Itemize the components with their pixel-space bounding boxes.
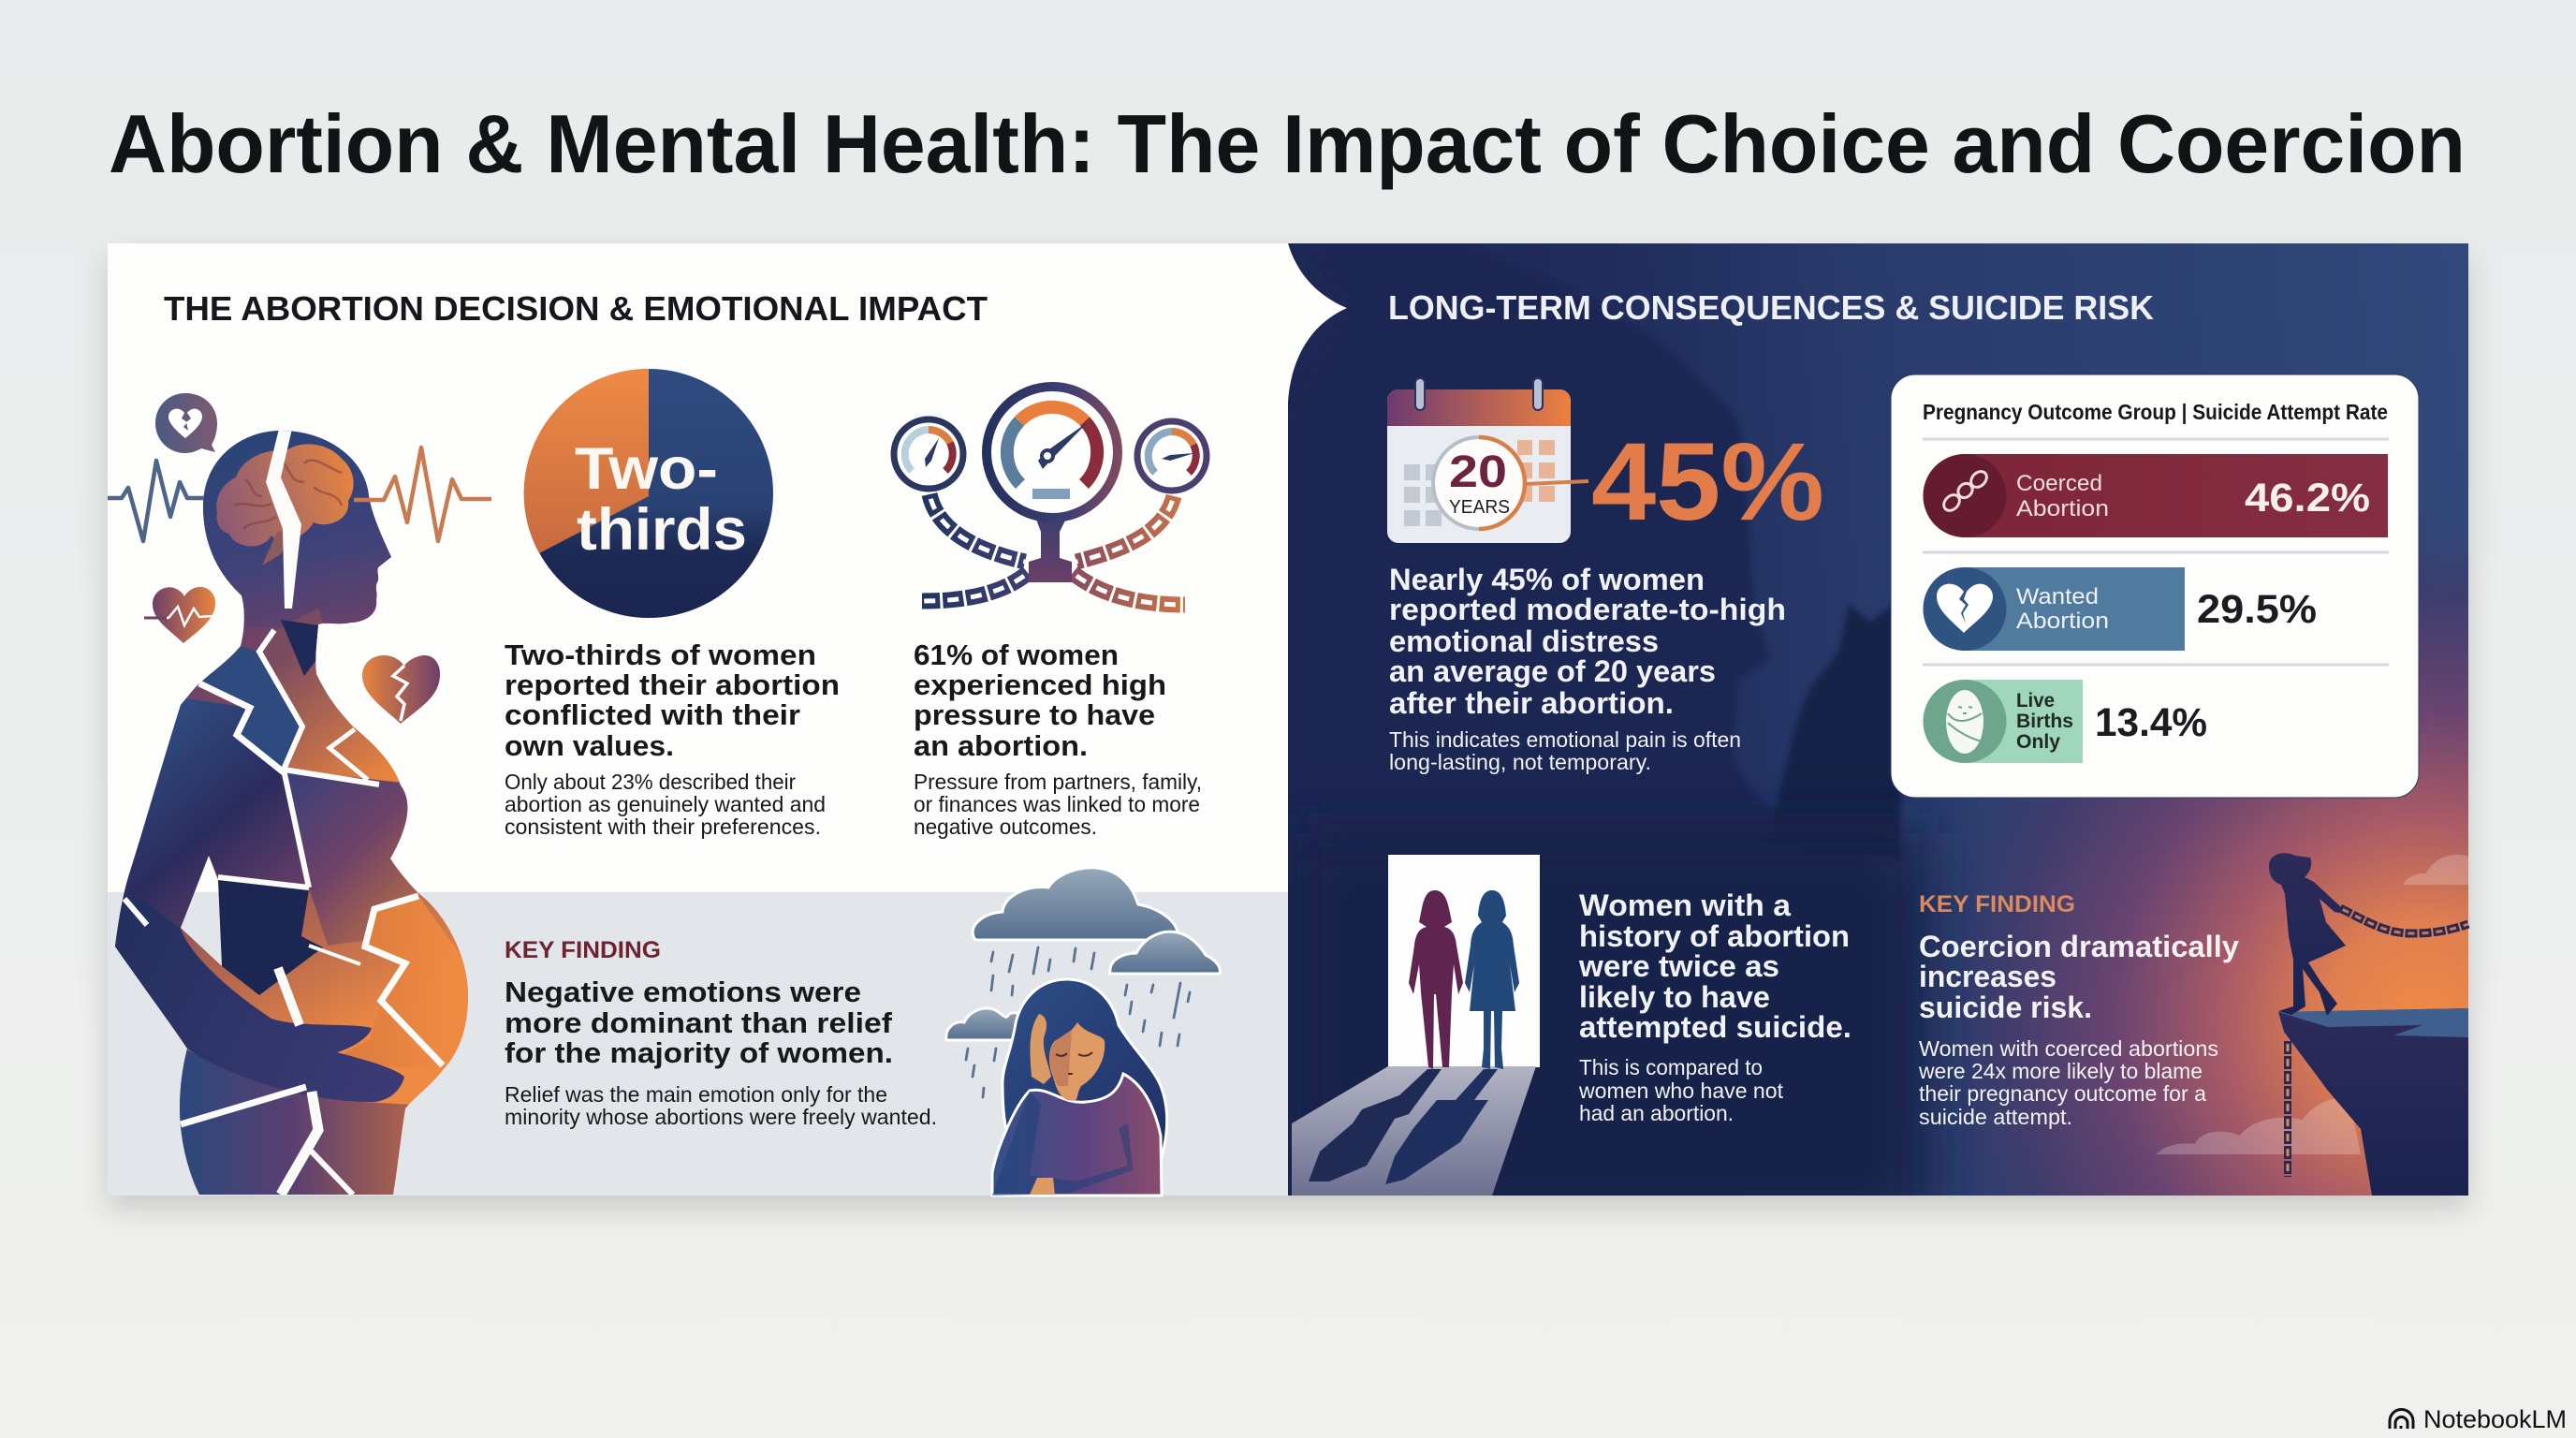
text block: twice as likely: This is compared to (1579, 1055, 1763, 1079)
chart: two-thirds pie (524, 369, 773, 618)
bar: live births only: Live (2016, 690, 2055, 712)
text block: key finding right: suicide attempt. (1919, 1105, 2072, 1129)
text block: two-thirds conflicted: Only about 23% described their (505, 770, 796, 794)
text block: two-thirds conflicted: conflicted with their (505, 698, 800, 731)
icon: speech bubble with broken heart (155, 393, 217, 453)
icon: horizontal chain (2340, 908, 2468, 933)
text block: 45 percent distress: long-lasting, not temporary. (1389, 750, 1651, 774)
text block: key finding left: more dominant than relief (505, 1006, 893, 1039)
bar: wanted abortion: Abortion (2016, 609, 2109, 634)
bar: live births only (1923, 680, 2207, 763)
text block: 61 percent pressure: 61% of women (914, 638, 1119, 671)
text block: key finding right: suicide risk. (1919, 990, 2092, 1024)
pie label (575, 436, 747, 563)
text block: two-thirds conflicted: own values. (505, 729, 674, 762)
bar: live births only: Births (2016, 711, 2073, 732)
text block: key finding left: KEY FINDING (505, 937, 661, 963)
stat: 45 percent: 45% (1591, 420, 1824, 544)
icon: left gauge (894, 419, 963, 489)
icon: calendar 20 years: YEARS (1449, 497, 1510, 518)
text block: key finding right: KEY FINDING (1919, 891, 2075, 917)
title: Abortion & Mental Health: The Impact of Choice and Coercion (109, 97, 2466, 190)
icon: right gauge (1137, 421, 1207, 491)
text block: 61 percent pressure: an abortion. (914, 729, 1088, 762)
logo: NotebookLM: NotebookLM (2423, 1405, 2567, 1433)
background: head silhouettes (1288, 243, 1928, 1226)
text block: 45 percent distress: an average of 20 years (1389, 654, 1716, 688)
icon: fractured pregnant woman silhouette (108, 426, 487, 1198)
text block: two-thirds conflicted: consistent with their preferences. (505, 814, 821, 839)
panel: abortion decision and emotional impact (108, 296, 1288, 1196)
bar: wanted abortion: Wanted (2016, 584, 2099, 609)
icon: rain clouds (946, 868, 1220, 1097)
text block: 61 percent pressure: experienced high (914, 668, 1166, 701)
text block: key finding right: Coercion dramatically (1919, 930, 2239, 963)
text block: twice as likely: had an abortion. (1579, 1101, 1734, 1125)
text block: key finding left: minority whose abortions were freely wanted. (505, 1105, 937, 1129)
icon: broken heart (362, 655, 440, 724)
illustration: woman on cliff with chain (2156, 853, 2468, 1196)
heading: left panel: THE ABORTION DECISION & EMOTIONAL IMPACT (164, 289, 988, 328)
icon: pressure gauges with chains (894, 387, 1207, 605)
text block: twice as likely: attempted suicide. (1579, 1010, 1852, 1044)
text block: key finding left: Relief was the main emotion only for the (505, 1082, 887, 1107)
text block: 45 percent distress: This indicates emotional pain is often (1389, 727, 1741, 752)
panel: long-term consequences and suicide risk (1288, 243, 2468, 1226)
text block: twice as likely: women who have not (1578, 1078, 1784, 1103)
icon: calendar 20 years (1387, 378, 1588, 543)
text block: key finding right: were 24x more likely to blame (1918, 1059, 2203, 1083)
icon: hanging chain (2284, 1041, 2291, 1177)
bar: coerced abortion: Coerced (2016, 471, 2102, 496)
card: suicide attempt rate table (1891, 374, 2419, 798)
text block: key finding right: their pregnancy outcome for a (1919, 1081, 2206, 1106)
text block: 45 percent distress: after their abortion. (1389, 686, 1674, 720)
panel shadow (108, 243, 2468, 1196)
text block: two-thirds conflicted: abortion as genuinely wanted and (505, 792, 826, 816)
icon: brain (216, 444, 354, 565)
bar: live births only: 13.4% (2095, 700, 2207, 745)
icon: heart with pulse (144, 587, 215, 643)
bar: wanted abortion: 29.5% (2197, 587, 2317, 632)
text block: 61 percent pressure: Pressure from partners, family, (914, 770, 1202, 794)
icon: calendar 20 years: 20 (1449, 448, 1507, 497)
text block: two-thirds conflicted: reported their abortion (505, 668, 840, 701)
text block: 45 percent distress (1389, 563, 1786, 774)
text block: twice as likely: were twice as (1578, 949, 1779, 983)
text block: key finding left: for the majority of women. (505, 1036, 893, 1069)
text block: 45 percent distress: Nearly 45% of women (1389, 563, 1705, 596)
icon: large gauge (987, 387, 1118, 518)
text block: twice as likely (1578, 888, 1852, 1125)
pie label: Two- (575, 436, 718, 502)
text block: key finding left (505, 937, 937, 1129)
text block: 45 percent distress: reported moderate-to-high (1389, 593, 1786, 626)
text block: key finding right (1918, 891, 2239, 1129)
text block: key finding right: increases (1919, 960, 2056, 993)
icon: sad woman (992, 979, 1167, 1196)
bar: coerced abortion: Abortion (2016, 496, 2109, 521)
illustration: doorway with two women (1292, 855, 1540, 1196)
text block: twice as likely: likely to have (1579, 980, 1770, 1014)
table title: Pregnancy Outcome Group | Suicide Attempt Rate (1923, 400, 2388, 424)
fracture lines (124, 429, 443, 1195)
text block: twice as likely: history of abortion (1579, 919, 1850, 953)
pie label: thirds (577, 497, 747, 563)
bar: coerced abortion (1923, 454, 2388, 537)
text block: 45 percent distress: emotional distress (1389, 624, 1659, 658)
text block: twice as likely: Women with a (1579, 888, 1791, 922)
text block: two-thirds conflicted: Two-thirds of women (505, 638, 816, 671)
text block: 61 percent pressure: pressure to have (914, 698, 1155, 731)
heading: right panel: LONG-TERM CONSEQUENCES & SUICIDE RISK (1388, 288, 2154, 327)
text block: two-thirds conflicted (505, 638, 840, 839)
text block: 61 percent pressure: or finances was linked to more (914, 792, 1200, 816)
text block: key finding right: Women with coerced abortions (1919, 1036, 2218, 1061)
text block: key finding left: Negative emotions were (505, 976, 861, 1008)
text block: 61 percent pressure (914, 638, 1202, 839)
bar: coerced abortion: 46.2% (2245, 476, 2370, 521)
icon: ecg line left (108, 461, 204, 541)
text block: 61 percent pressure: negative outcomes. (914, 814, 1097, 839)
bar: wanted abortion (1923, 567, 2317, 651)
bar: live births only: Only (2016, 731, 2060, 753)
icon: ecg line right (354, 448, 491, 541)
